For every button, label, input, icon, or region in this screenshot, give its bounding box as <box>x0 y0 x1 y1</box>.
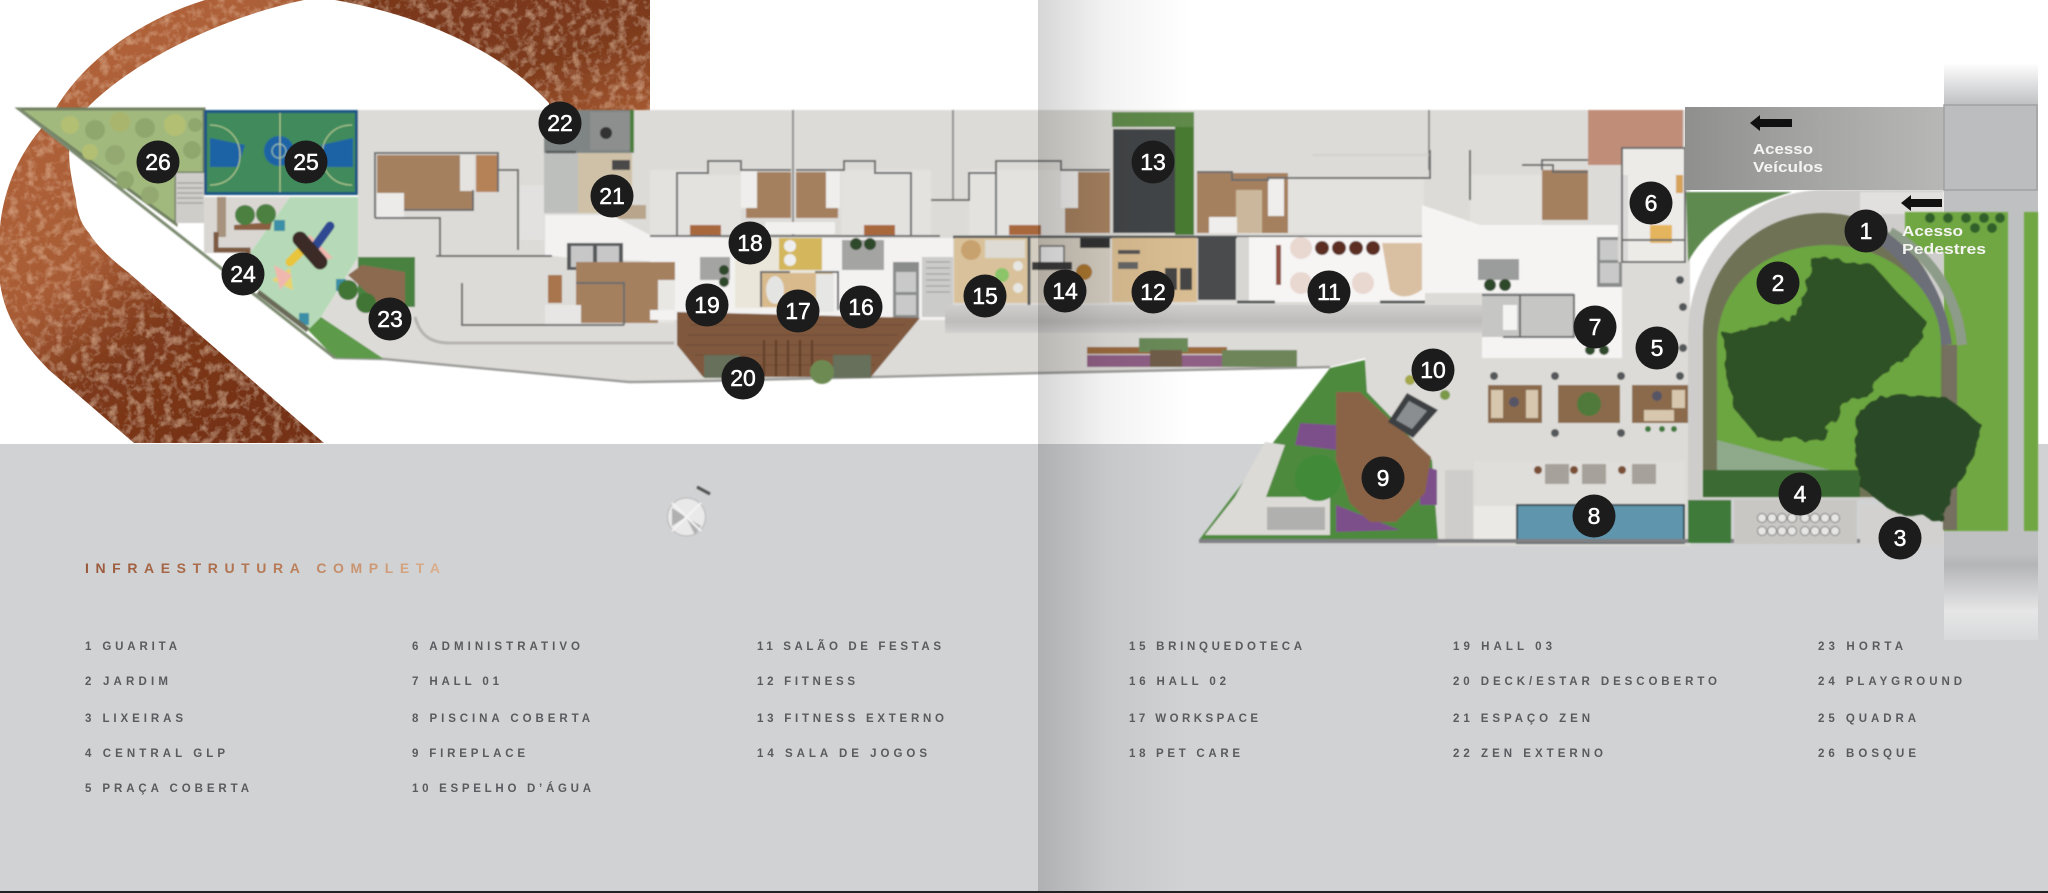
marker 1: 1 <box>1860 218 1872 244</box>
upper edge line of site <box>19 109 335 358</box>
marker 2 <box>1756 262 1800 304</box>
legend column 2: 8 PISCINA COBERTA <box>412 713 590 725</box>
marker 5 <box>1636 326 1678 370</box>
brinquedoteca room <box>954 238 1029 303</box>
marker 17: 17 <box>785 298 811 324</box>
terracotta block <box>1588 110 1683 165</box>
marker 23 <box>368 298 412 340</box>
fireplace deck <box>1336 392 1431 522</box>
marker 16: 16 <box>848 294 874 320</box>
marker 16 <box>840 286 882 328</box>
legend column 6: 23 HORTA <box>1818 641 1903 653</box>
marker 3 <box>1878 516 1922 560</box>
right gray strip <box>1944 63 2038 640</box>
marker 2: 2 <box>1772 270 1784 296</box>
legend column 3 <box>757 640 944 760</box>
elevators <box>567 243 623 270</box>
apartment: top left unit <box>375 153 544 255</box>
legend column 6: 26 BOSQUE <box>1818 748 1916 760</box>
marker 12 <box>1132 270 1174 314</box>
legend column 5: 19 HALL 03 <box>1453 641 1552 653</box>
road strip below building <box>945 305 1482 333</box>
lawn <box>1717 245 1941 480</box>
bottom plan edge <box>1199 539 1944 543</box>
right wing hall <box>1422 205 1622 358</box>
pool <box>1517 505 1684 543</box>
units: upper row apartments <box>650 110 1600 236</box>
legend column 5: 21 ESPAÇO ZEN <box>1453 713 1590 725</box>
hall stairs <box>922 257 953 317</box>
fireplace garden <box>1199 360 1438 540</box>
curved access road <box>1688 190 1944 500</box>
legend column 1: 5 PRAÇA COBERTA <box>85 783 249 795</box>
page fold shadow <box>1038 0 1188 893</box>
green planter by pool <box>1688 500 1731 543</box>
acesso pedestres arrow and label: Pedestres <box>1902 241 1986 258</box>
legend column 5: 20 DECK/ESTAR DESCOBERTO <box>1453 676 1717 688</box>
marker 14 <box>1044 270 1086 312</box>
legend column 1: 3 LIXEIRAS <box>85 713 183 725</box>
acesso pedestres arrow and label: Acesso <box>1902 223 1963 240</box>
numbered markers <box>136 102 1922 560</box>
acesso veiculos arrow and label: Veículos <box>1753 159 1823 176</box>
compass <box>668 487 710 536</box>
workspace room <box>761 272 838 312</box>
planter strip <box>1087 338 1297 367</box>
side lawn <box>1905 212 2038 531</box>
fitness dark floor <box>1198 237 1236 300</box>
legend column 3: 12 FITNESS <box>757 676 855 688</box>
marker 18 <box>728 222 772 264</box>
hall 02 rug <box>842 240 884 270</box>
gray plant border <box>1890 232 1962 345</box>
jardim garden <box>1703 213 1980 530</box>
legend column 2: 10 ESPELHO D’ÁGUA <box>412 782 591 795</box>
marker 6 <box>1630 182 1672 224</box>
marker 11: 11 <box>1317 279 1341 305</box>
fitness externo <box>1112 112 1194 235</box>
green corner by road <box>1686 192 1792 262</box>
legend column 2: 7 HALL 01 <box>412 676 500 688</box>
lower green triangle <box>308 317 384 359</box>
praca coberta tables <box>1488 385 1688 423</box>
marker 20 <box>722 356 764 400</box>
legend column 4: 15 BRINQUEDOTECA <box>1129 641 1302 653</box>
apartment: lower left unit <box>436 256 674 325</box>
title: infraestrutura completa: INFRAESTRUTURA COMPLETA <box>85 560 440 576</box>
acesso pedestres arrow and label <box>1901 195 1986 258</box>
marker 11 <box>1308 270 1350 314</box>
plaza columns <box>1490 276 1687 437</box>
acesso veiculos arrow and label <box>1750 115 1823 176</box>
site plan <box>19 109 1944 546</box>
background: gray lower panel <box>0 444 2048 893</box>
salao de festas <box>1237 237 1428 302</box>
lixeiras area <box>1860 505 1944 546</box>
legend column 4: 18 PET CARE <box>1129 748 1240 760</box>
fitness room <box>1112 238 1197 302</box>
marker 25: 25 <box>293 149 319 175</box>
marker 8: 8 <box>1588 503 1600 529</box>
zen stairs and spaces <box>544 110 646 219</box>
marker 17 <box>776 290 820 332</box>
marker 20: 20 <box>730 365 756 391</box>
marker 10 <box>1412 348 1454 392</box>
sala de jogos room <box>1029 238 1110 312</box>
marker 13 <box>1132 140 1174 184</box>
marker 22 <box>538 102 582 144</box>
marker 1 <box>1844 210 1888 252</box>
marker 18: 18 <box>737 230 763 256</box>
bosque area <box>19 109 204 224</box>
bosque stairs <box>176 173 204 223</box>
pedestrian gate floor <box>1860 192 1944 214</box>
marker 12: 12 <box>1140 279 1166 305</box>
main floor slab <box>321 110 1690 546</box>
marker 19: 19 <box>694 292 720 318</box>
acesso veiculos arrow and label: Acesso <box>1753 141 1813 158</box>
marker 22: 22 <box>547 110 573 136</box>
wall above amenities <box>953 236 1430 238</box>
central amenity white hall <box>650 238 953 320</box>
hall elevators <box>893 262 919 318</box>
central GLP <box>1734 500 1857 544</box>
legend column 4: 16 HALL 02 <box>1129 676 1226 688</box>
legend column 2: 6 ADMINISTRATIVO <box>412 641 580 653</box>
legend column 2 <box>412 641 591 795</box>
legend column 6 <box>1818 641 1962 760</box>
piscina coberta block <box>1445 461 1685 543</box>
administrative block <box>1618 148 1685 262</box>
legend column 4: 17 WORKSPACE <box>1129 713 1258 725</box>
marker 24 <box>222 252 264 296</box>
horta garden <box>338 257 415 313</box>
marker 24: 24 <box>230 261 256 287</box>
playground <box>204 197 358 330</box>
legend column 6: 25 QUADRA <box>1818 713 1916 725</box>
marker 21 <box>590 174 634 218</box>
marker 6: 6 <box>1645 190 1657 216</box>
marker 9 <box>1362 456 1404 500</box>
marker 3: 3 <box>1894 525 1906 551</box>
lower plan edge <box>335 358 1330 382</box>
marker 8 <box>1572 494 1616 538</box>
legend column 2: 9 FIREPLACE <box>412 748 525 760</box>
tree canopy small <box>1854 393 1980 520</box>
right wing stairs <box>1482 293 1574 337</box>
marker 15: 15 <box>972 283 998 309</box>
espelho d'agua <box>1388 375 1450 438</box>
hall 03 rug <box>700 257 730 280</box>
marker 21: 21 <box>599 183 625 209</box>
pet care room <box>735 238 822 308</box>
legend column 5 <box>1453 641 1717 760</box>
legend column 6: 24 PLAYGROUND <box>1818 676 1962 688</box>
playground equipment <box>272 226 333 290</box>
marker 7: 7 <box>1589 314 1601 340</box>
marker 13: 13 <box>1140 149 1166 175</box>
copper S shape <box>0 0 650 443</box>
marker 25 <box>284 140 328 184</box>
background: white upper page <box>0 0 2048 444</box>
marker 19 <box>686 284 728 326</box>
legend column 1: 2 JARDIM <box>85 676 168 688</box>
diagonal hedge <box>258 292 308 330</box>
marker 9: 9 <box>1377 465 1389 491</box>
right wing elevators <box>1597 237 1622 287</box>
marker 4 <box>1778 472 1822 516</box>
marker 23: 23 <box>377 306 403 332</box>
marker 15 <box>964 274 1006 318</box>
bottom page edge <box>0 891 2048 893</box>
marker 26: 26 <box>145 149 171 175</box>
quadra sports court <box>204 110 358 195</box>
legend column 4 <box>1129 641 1302 760</box>
marker 5: 5 <box>1651 335 1663 361</box>
white circulation hall left <box>545 215 731 320</box>
marker 7 <box>1574 306 1616 348</box>
legend column 3: 11 SALÃO DE FESTAS <box>757 640 941 653</box>
marker 14: 14 <box>1052 278 1078 304</box>
marker 26 <box>136 140 180 184</box>
legend column 1: 4 CENTRAL GLP <box>85 748 225 760</box>
legend column 3: 14 SALA DE JOGOS <box>757 748 927 760</box>
tree canopy large <box>1725 257 1925 440</box>
curved driveway line <box>415 317 674 343</box>
marker 10: 10 <box>1420 357 1446 383</box>
legend column 1 <box>85 641 249 795</box>
legend column 5: 22 ZEN EXTERNO <box>1453 748 1603 760</box>
marker 4: 4 <box>1794 481 1807 507</box>
legend column 1: 1 GUARITA <box>85 641 177 653</box>
vehicle access tile <box>1685 105 2037 190</box>
legend column 3: 13 FITNESS EXTERNO <box>757 713 944 725</box>
deck wood area <box>677 312 920 384</box>
